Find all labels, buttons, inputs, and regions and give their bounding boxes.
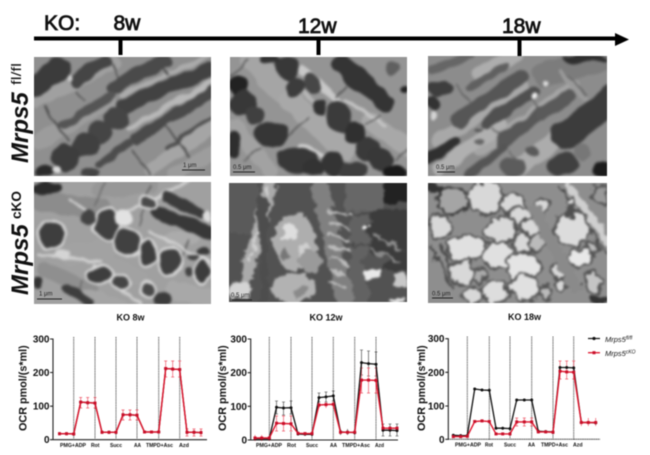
error bars bbox=[515, 361, 596, 426]
treatment labels bbox=[455, 442, 582, 448]
treatment dividers bbox=[467, 336, 574, 440]
treatment labels: Rot bbox=[485, 442, 493, 448]
treatment labels: TMPD+Asc bbox=[146, 443, 173, 449]
legend entry: fl/fl: fl/fl bbox=[626, 336, 633, 342]
micrograph: 8w cKO: 1 μm bbox=[39, 292, 52, 298]
treatment labels: PMG+ADP bbox=[256, 443, 282, 449]
y axis label: OCR pmol/(s*ml) bbox=[416, 345, 428, 431]
treatment labels bbox=[256, 443, 384, 449]
row label: Mrps5 cKO bbox=[7, 191, 34, 295]
legend entry: fl/fl bbox=[588, 335, 633, 344]
row label: Mrps5 fl/fl: Mrps5 bbox=[7, 92, 34, 163]
treatment labels: Rot bbox=[91, 443, 100, 449]
micrograph: 18w cKO bbox=[427, 182, 608, 304]
chart: KO 8w bbox=[18, 312, 207, 449]
row label: Mrps5 fl/fl: fl/fl bbox=[8, 63, 24, 85]
timeline label: 12w: 12w bbox=[298, 15, 337, 38]
y axis: 0 bbox=[44, 435, 50, 446]
y axis: 0 bbox=[241, 436, 247, 446]
y axis: 200 bbox=[33, 368, 50, 379]
treatment labels: Succ bbox=[110, 443, 122, 449]
series: Mrps5 cKO bbox=[453, 371, 596, 437]
treatment labels: AA bbox=[528, 442, 535, 448]
legend entry: cKO: Mrps5 bbox=[605, 349, 626, 358]
treatment labels: Succ bbox=[306, 443, 318, 449]
series: Mrps5 cKO bbox=[60, 368, 201, 434]
y axis: 100 bbox=[230, 402, 247, 413]
y axis: 200 bbox=[230, 368, 247, 379]
timeline label: KO: KO: bbox=[44, 12, 80, 35]
treatment labels bbox=[60, 443, 189, 449]
series: Mrps5 fl/fl bbox=[453, 368, 596, 436]
micrograph: 8w fl/fl bbox=[33, 56, 212, 177]
y axis: 300 bbox=[230, 334, 247, 346]
y axis: 0 bbox=[439, 435, 445, 446]
legend entry: cKO bbox=[588, 349, 636, 358]
legend entry: cKO: cKO bbox=[626, 350, 636, 356]
y axis: 300 bbox=[33, 334, 50, 346]
y axis label: OCR pmol/(s*ml) bbox=[18, 345, 30, 431]
legend bbox=[588, 335, 636, 358]
chart title: KO 18w bbox=[508, 312, 542, 322]
treatment labels: TMPD+Asc bbox=[541, 442, 568, 448]
micrograph: 12w fl/fl: 0.5 μm bbox=[233, 165, 251, 171]
row label: Mrps5 cKO: Mrps5 bbox=[7, 224, 34, 295]
error bars: cKO bbox=[255, 368, 378, 441]
y axis: 100 bbox=[428, 402, 445, 412]
treatment labels: PMG+ADP bbox=[60, 443, 86, 449]
micrograph: 18w cKO: 0.5 μm bbox=[432, 292, 450, 298]
y axis: 100 bbox=[33, 402, 50, 413]
series: Mrps5 fl/fl bbox=[255, 363, 397, 439]
y axis label: OCR pmol/(s*ml) bbox=[217, 345, 229, 431]
treatment labels: AA bbox=[134, 443, 141, 449]
timeline label: 18w: 18w bbox=[502, 15, 541, 38]
timeline label: 8w: 8w bbox=[114, 12, 141, 35]
chart title: KO 12w bbox=[309, 312, 344, 322]
micrograph: 12w fl/fl bbox=[229, 56, 408, 177]
treatment dividers bbox=[269, 337, 376, 440]
timeline arrow bbox=[34, 33, 629, 56]
micrograph: 8w fl/fl: 1 μm bbox=[183, 163, 196, 169]
chart: KO 12w bbox=[217, 312, 398, 449]
error bars: fl/fl bbox=[275, 350, 398, 436]
treatment labels: AA bbox=[330, 443, 337, 449]
error bars bbox=[79, 361, 202, 436]
treatment labels: Succ bbox=[504, 442, 516, 448]
y axis: 300 bbox=[428, 334, 445, 345]
y axis bbox=[428, 334, 600, 446]
y axis bbox=[230, 334, 398, 446]
legend entry: fl/fl: Mrps5 bbox=[605, 335, 626, 344]
treatment labels: Azd bbox=[179, 443, 189, 449]
series: Mrps5 fl/fl bbox=[60, 368, 201, 434]
series: Mrps5 cKO bbox=[255, 380, 397, 438]
micrograph: 18w fl/fl: 0.5 μm bbox=[436, 165, 454, 171]
y axis: 200 bbox=[428, 368, 445, 379]
row label: Mrps5 cKO: cKO bbox=[9, 191, 24, 219]
micrograph: 12w cKO bbox=[228, 182, 408, 303]
micrograph: 8w cKO bbox=[33, 181, 212, 305]
y axis bbox=[33, 334, 207, 446]
treatment labels: Azd bbox=[573, 442, 582, 448]
micrograph: 12w cKO: 0.5 μm bbox=[231, 293, 249, 299]
micrograph: 18w fl/fl bbox=[427, 55, 608, 177]
treatment labels: Azd bbox=[375, 443, 384, 449]
chart: KO 18w bbox=[416, 312, 600, 448]
treatment labels: TMPD+Asc bbox=[342, 443, 370, 449]
chart title: KO 8w bbox=[116, 312, 145, 322]
treatment labels: Rot bbox=[287, 443, 296, 449]
treatment labels: PMG+ADP bbox=[455, 442, 481, 448]
treatment dividers bbox=[74, 337, 180, 440]
